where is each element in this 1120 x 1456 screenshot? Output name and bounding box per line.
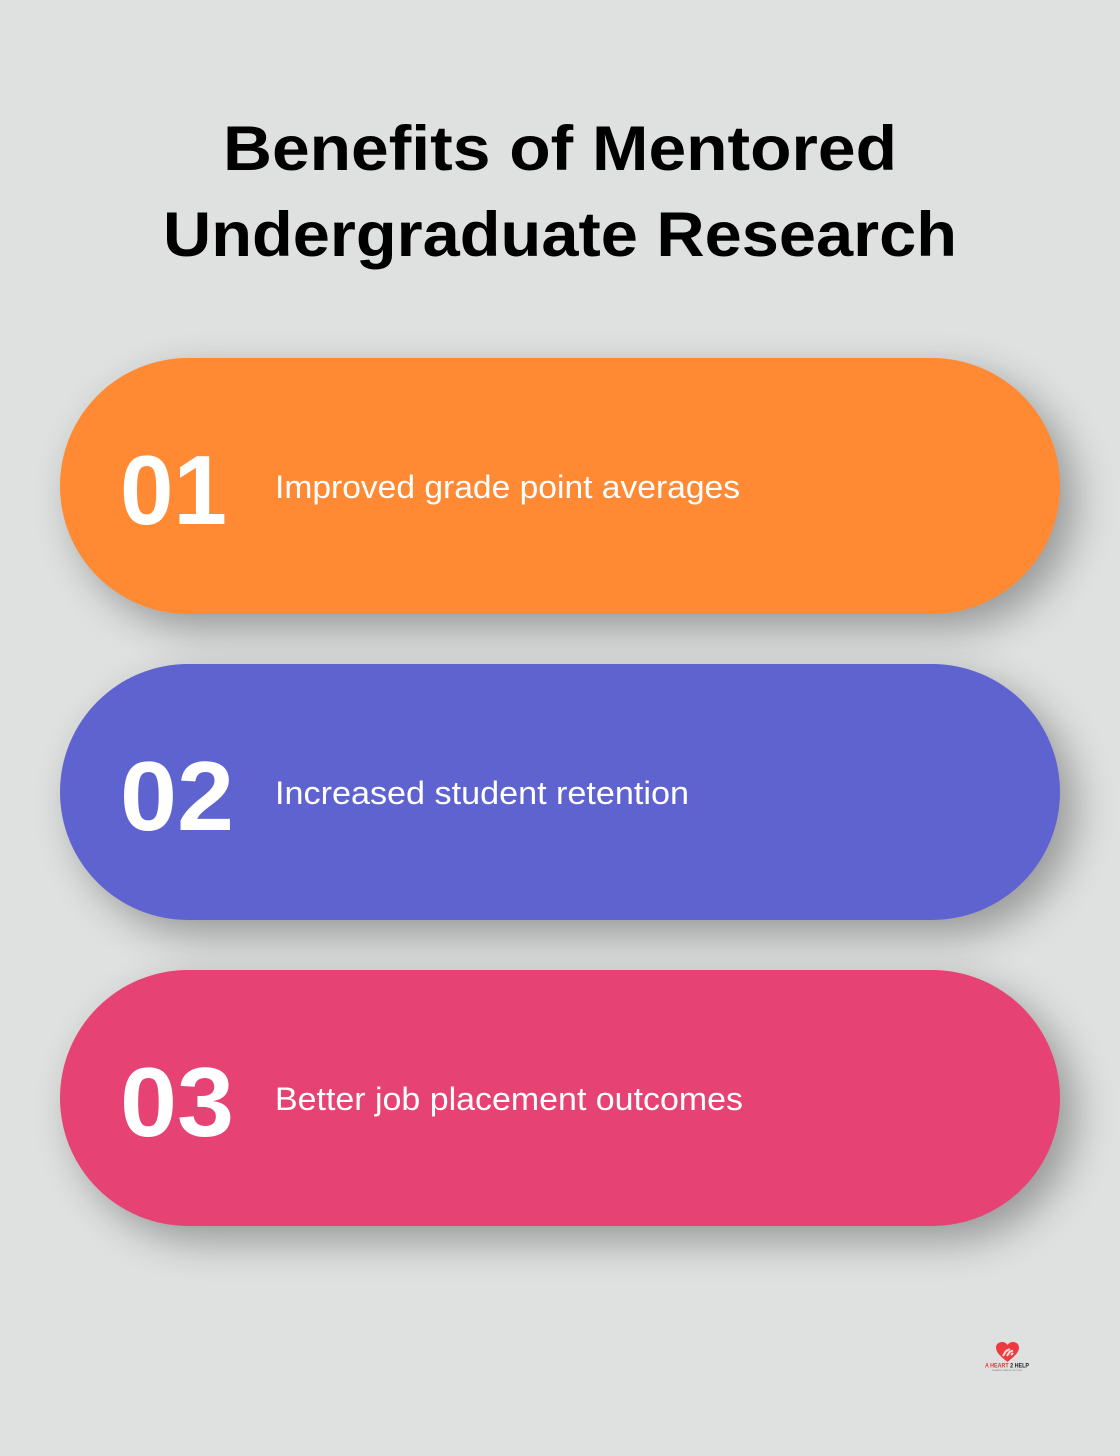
icon: white hands in heart xyxy=(1003,1349,1013,1356)
icon: heart xyxy=(996,1342,1019,1362)
logo: A Heart 2 Help xyxy=(985,1342,1029,1372)
item 03 text: Better job placement outcomes xyxy=(275,1081,743,1117)
panel: 03 pink pill xyxy=(60,970,1060,1226)
title: Benefits of Mentored xyxy=(223,114,897,184)
item 03 text xyxy=(120,1047,743,1157)
logo tagline: SHARING MAKES BETTER xyxy=(992,1369,1022,1372)
item 01 text: 01 xyxy=(120,435,227,545)
logo wordmark: A HEART 2 HELP xyxy=(985,1364,1029,1370)
item 02 text: 02 xyxy=(120,741,234,851)
title xyxy=(163,114,957,270)
item 02 text: Increased student retention xyxy=(275,775,689,811)
title: Undergraduate Research xyxy=(163,200,957,270)
item 03 text: 03 xyxy=(120,1047,234,1157)
item 02 text xyxy=(120,741,689,851)
panel: 02 indigo pill xyxy=(60,664,1060,920)
panel: 01 orange pill xyxy=(60,358,1060,614)
item 01 text xyxy=(120,435,740,545)
item 01 text: Improved grade point averages xyxy=(275,469,740,505)
